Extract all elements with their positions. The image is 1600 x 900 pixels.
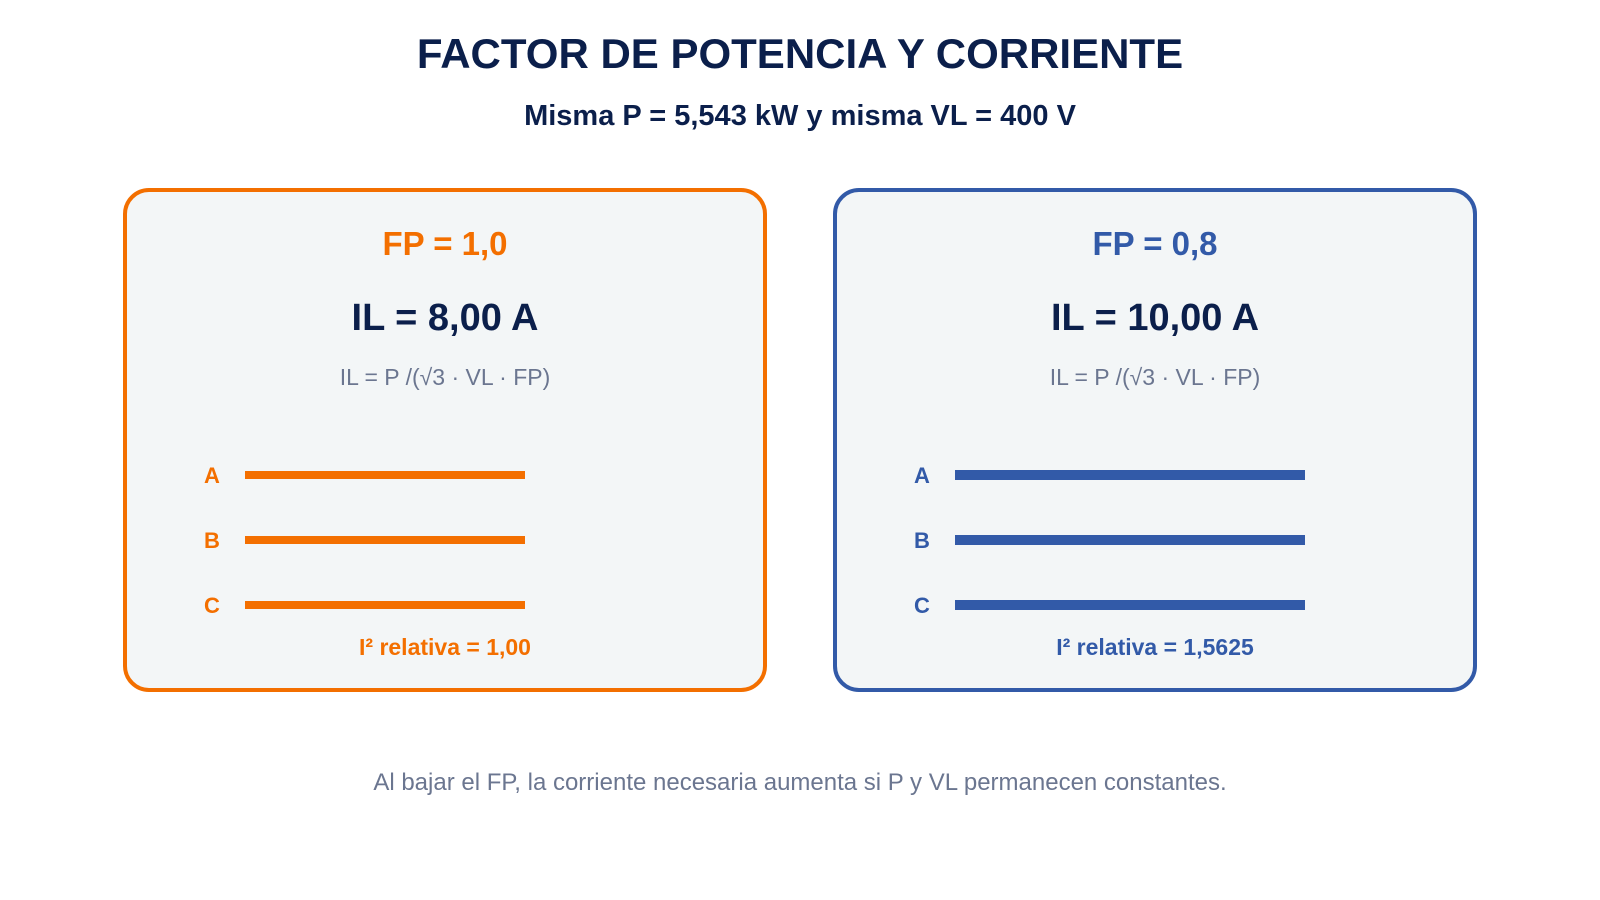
- panel background: [125, 190, 765, 690]
- formula: IL = P /(√3 · VL · FP): [340, 364, 550, 390]
- current value: IL = 10,00 A: [1051, 297, 1259, 339]
- phase B bar: [955, 535, 1305, 545]
- panel: FP 0,8: [835, 190, 1475, 690]
- current value: IL = 8,00 A: [352, 297, 538, 339]
- phase A label: A: [914, 463, 930, 488]
- phase C label: C: [914, 593, 930, 618]
- phase B label: B: [204, 528, 220, 553]
- footer note: Al bajar el FP, la corriente necesaria aumenta si P y VL permanecen constantes.: [373, 769, 1227, 796]
- relative I squared: I² relativa = 1,5625: [1056, 634, 1254, 660]
- panel: FP 1,0: [125, 190, 765, 690]
- phase A bar: [955, 470, 1305, 480]
- panel background: [835, 190, 1475, 690]
- phase C bar: [955, 600, 1305, 610]
- phase C label: C: [204, 593, 220, 618]
- phase B bar: [245, 536, 525, 544]
- formula: IL = P /(√3 · VL · FP): [1050, 364, 1260, 390]
- phase A label: A: [204, 463, 220, 488]
- phase A bar: [245, 471, 525, 479]
- title: FACTOR DE POTENCIA Y CORRIENTE: [417, 30, 1183, 77]
- subtitle: Misma P = 5,543 kW y misma VL = 400 V: [524, 100, 1077, 132]
- phase B label: B: [914, 528, 930, 553]
- panel heading: FP = 0,8: [1092, 225, 1218, 262]
- relative I squared: I² relativa = 1,00: [359, 634, 531, 660]
- panel heading: FP = 1,0: [382, 225, 508, 262]
- phase C bar: [245, 601, 525, 609]
